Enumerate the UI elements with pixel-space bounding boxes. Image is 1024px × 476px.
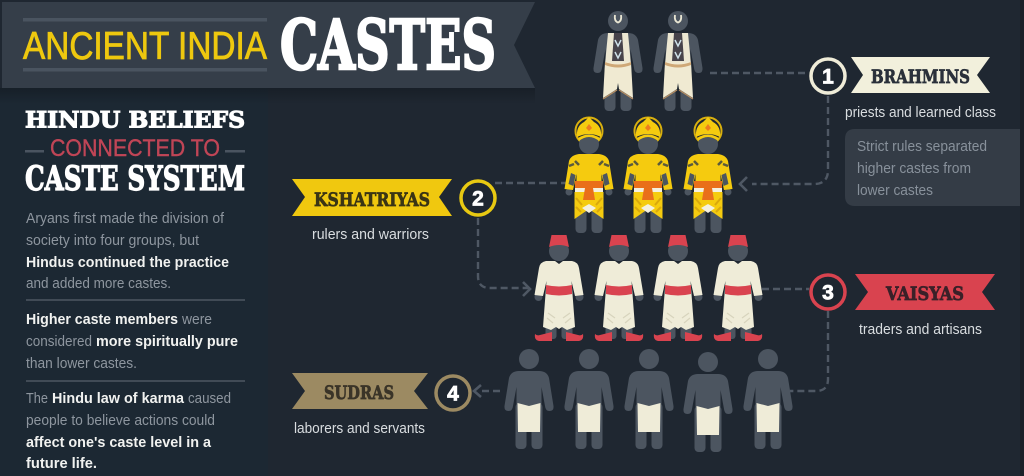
label: traders: traders and artisans — [859, 321, 982, 338]
badge 4: 4 — [447, 382, 459, 406]
text block: higher caste: considered — [26, 333, 92, 350]
text block: karma — [26, 390, 231, 472]
label: priests: priests and learned class — [845, 104, 996, 121]
banner: kshatriyas: KSHATRIYAS — [314, 189, 430, 211]
connector: sudras to label — [474, 385, 500, 397]
text block: higher caste: were — [181, 311, 212, 328]
title: castes: CASTES — [280, 6, 496, 86]
text block: karma: caused — [188, 390, 231, 407]
callout: strict rules: Strict rules separated — [857, 138, 987, 155]
text block: higher caste: more spiritually pure — [96, 333, 238, 350]
text block: aryans: and added more castes. — [26, 275, 171, 292]
banner: brahmins — [851, 57, 990, 93]
label: laborers: laborers and servants — [294, 420, 425, 437]
connector: vaisyas to sudras — [762, 289, 828, 391]
text block: karma: affect one's caste level in a — [26, 434, 212, 451]
text block: higher caste: Higher caste members — [26, 311, 178, 328]
figures: brahmins — [593, 11, 703, 111]
banner: kshatriyas — [292, 179, 452, 216]
heading: connected to: CONNECTED TO — [50, 135, 220, 162]
text block: karma: The — [26, 390, 48, 407]
heading: caste system: CASTE SYSTEM — [25, 159, 245, 199]
text block: aryans: Hindus continued the practice — [26, 254, 229, 271]
heading: hindu beliefs: HINDU BELIEFS — [25, 108, 245, 134]
callout: strict rules — [845, 129, 1020, 206]
text block: higher caste — [26, 311, 238, 372]
banner: vaisyas — [855, 274, 995, 310]
text block: higher caste: than lower castes. — [26, 355, 137, 372]
text block: karma: future life. — [26, 455, 97, 472]
connector: kshatriyas to vaisyas — [478, 183, 566, 296]
badge 2: 2 — [472, 188, 484, 210]
banner: vaisyas: VAISYAS — [885, 283, 964, 305]
figures: sudras — [504, 349, 793, 452]
text block: karma: Hindu law of karma — [52, 390, 185, 407]
badge 1 — [811, 59, 845, 93]
figures: vaisyas — [534, 235, 762, 341]
left panel background — [0, 88, 268, 476]
callout: strict rules: higher castes from — [857, 160, 971, 177]
banner: sudras — [292, 373, 428, 409]
header ribbon — [2, 2, 535, 88]
text block: aryans: society into four groups, but — [26, 232, 200, 249]
badge 4 — [436, 376, 470, 410]
badge 3: 3 — [822, 282, 834, 304]
badge 2 — [461, 181, 495, 215]
banner: brahmins: BRAHMINS — [871, 66, 970, 88]
text block: aryans — [26, 210, 229, 292]
figures: kshatriyas — [564, 117, 732, 233]
connector: brahmins to kshatriyas — [710, 73, 828, 191]
title: ancient india: ANCIENT INDIA — [23, 25, 267, 68]
text block: aryans: Aryans first made the division of — [26, 210, 225, 227]
text block: karma: people to believe actions could — [26, 412, 215, 429]
badge 3 — [811, 275, 845, 309]
panel: hindu beliefs — [25, 108, 245, 472]
callout: strict rules: lower castes — [857, 182, 933, 199]
badge 1: 1 — [822, 66, 834, 88]
banner: sudras: SUDRAS — [324, 382, 394, 404]
label: rulers: rulers and warriors — [312, 226, 429, 243]
